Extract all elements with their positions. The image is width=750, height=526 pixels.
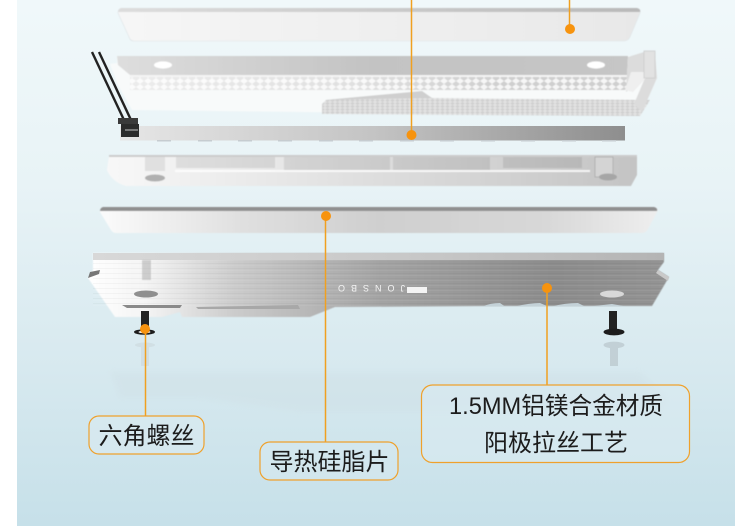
right screw reflection [604,342,624,366]
cable wires [92,52,131,120]
heat sink with diamond texture [110,51,657,116]
lower thermal pad [100,207,658,233]
icon: left screw [134,311,155,335]
callout: thermal silicone pad [260,442,398,480]
reflection of main plate [110,372,668,412]
leader line: LED strip [406,0,416,140]
icon: connector [118,118,139,137]
callout: material and process: 1.5MM铝镁合金材质 [449,393,663,420]
left screw reflection [135,342,155,366]
callout: material and process [422,385,690,462]
callout: material and process: 阳极拉丝工艺 [484,430,628,457]
main aluminium heat spreader [88,253,669,317]
callout: thermal silicone pad: 导热硅脂片 [270,449,390,476]
leader line: top pad [565,0,575,34]
icon: right screw [604,311,624,335]
leader line: hex screw [140,324,150,416]
top thermal pad [118,8,640,41]
callout: hex screw [89,416,204,454]
leader line: aluminium plate [542,283,552,385]
leader line: thermal pad [321,211,331,442]
aluminium frame [107,155,637,186]
logo text: JONSBO [332,283,405,293]
callout: hex screw: 六角螺丝 [98,423,194,450]
LED strip board [118,118,625,142]
